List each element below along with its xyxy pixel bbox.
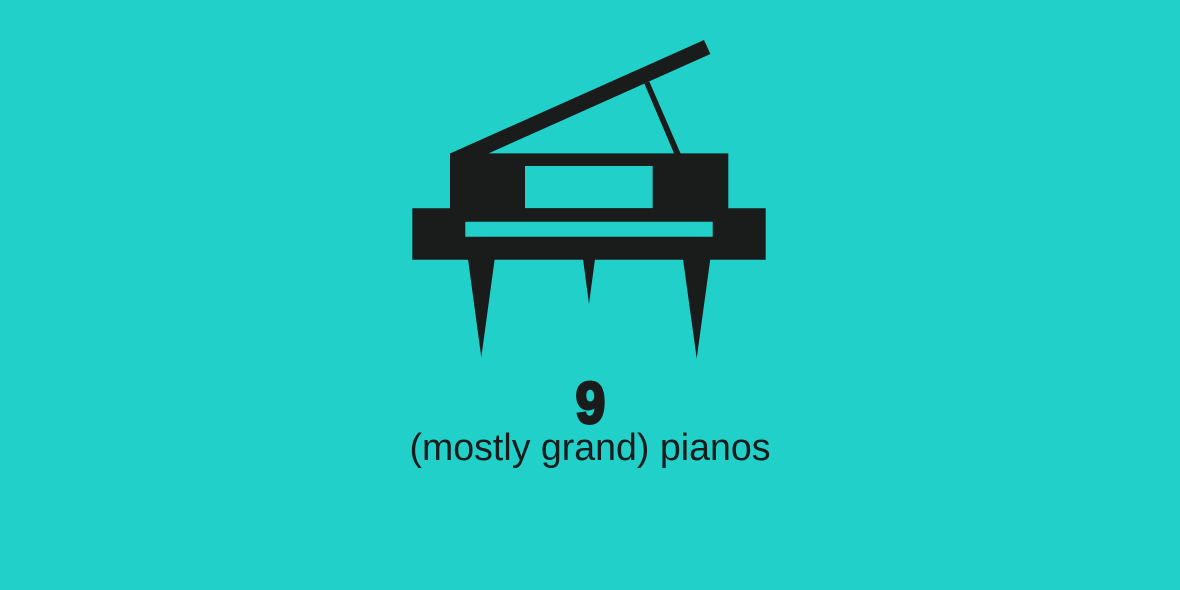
piano lid — [450, 40, 710, 154]
piano body with music-desk opening — [450, 153, 728, 209]
icon: grand piano — [412, 40, 766, 358]
left leg — [468, 259, 495, 358]
right leg — [683, 259, 710, 358]
lid prop — [644, 82, 681, 154]
keyboard with key slot — [412, 208, 766, 260]
label: (mostly grand) pianos: (mostly grand) pianos — [410, 427, 770, 469]
number: 9: 9 — [576, 371, 605, 435]
pedal — [583, 259, 595, 304]
